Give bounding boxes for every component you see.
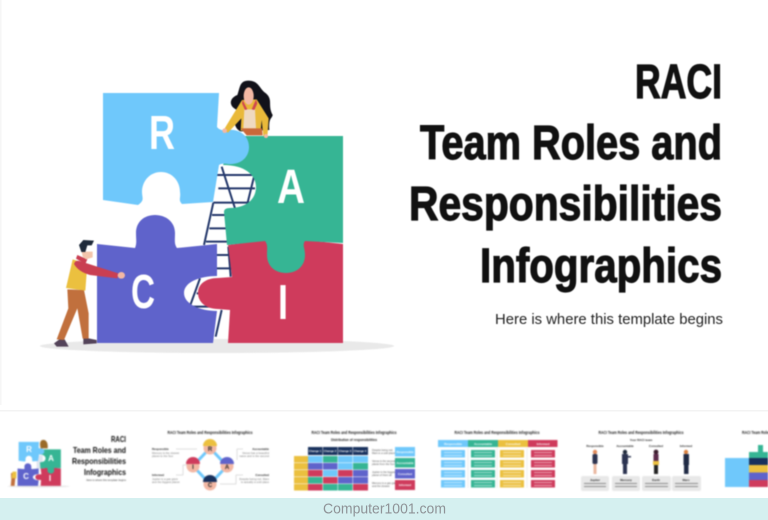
thumbnail title: RACI (111, 434, 126, 444)
thumbnail 5: your RACI team (581, 430, 701, 491)
thumbnail 5: your RACI team: Accountable (616, 444, 634, 448)
puzzle piece: R (blue) (103, 93, 249, 205)
thumbnail 3: responsibility matrix (294, 430, 415, 490)
puzzle piece: R (blue): R (149, 107, 175, 160)
puzzle piece: C (purple) (97, 215, 217, 343)
diamond links (193, 448, 227, 484)
thumbnail 5: your RACI team: Your RACI team (630, 438, 653, 442)
thumbnail title (72, 434, 126, 477)
matrix legend (372, 447, 415, 490)
matrix legend: Informed (399, 483, 411, 487)
column headers: Responsible (444, 442, 462, 446)
side labels: Responsible (152, 447, 169, 451)
thumbnail 1: cover slide (8, 434, 127, 488)
side labels: Jupiter is a gas giant (152, 477, 178, 481)
team figures (592, 450, 689, 474)
matrix table (294, 447, 368, 490)
role circles: C (208, 483, 213, 489)
side labels: Despite being red, Mars (239, 477, 270, 481)
side labels: Informed (152, 473, 164, 477)
team cards: Jupiter (590, 478, 601, 482)
matrix legend: Mercury is a gas giant (372, 481, 398, 485)
side labels: Accountable (252, 447, 269, 451)
puzzle piece: A (green): A (277, 161, 305, 214)
role circles: A (225, 465, 230, 471)
thumbnail 5: your RACI team: Responsible (586, 444, 604, 448)
footer band with site name: Computer1001.com (323, 502, 446, 518)
matrix legend: Venus is the second (372, 459, 396, 463)
thumbnail title: Responsibilities (72, 456, 126, 466)
team cards: Mercury (620, 478, 632, 482)
matrix legend: Despite being red, (372, 448, 393, 452)
thumbnail puzzle (8, 440, 70, 488)
thumbnail 2: diamond of RACI faces (152, 430, 270, 490)
side labels: and the biggest planet (152, 480, 180, 484)
side labels: name and is the second (239, 454, 269, 458)
thumbnail 2: diamond of RACI faces: RACI Team Roles and Responsibilities Infographics (168, 430, 253, 435)
title: Responsibilities (409, 178, 722, 231)
matrix table: Change 1 (309, 449, 322, 453)
matrix legend: and the closest (372, 484, 390, 488)
footer band with site name (0, 498, 768, 520)
thumbnail puzzle: C (23, 472, 29, 481)
side labels: Venus has a beautiful (242, 451, 269, 455)
thumbnail puzzle: I (49, 474, 51, 483)
team cards: Earth (652, 478, 660, 482)
thumbnail puzzle: A (48, 454, 54, 463)
thumbnail 3: responsibility matrix: RACI Team Roles and Responsibilities Infographics (312, 430, 397, 435)
side labels: Mercury is the closest (152, 451, 179, 455)
matrix legend: Consulted (398, 472, 412, 476)
column headers (438, 440, 558, 447)
column cards (441, 450, 555, 488)
matrix legend: planet from the Sun (372, 462, 395, 466)
side labels: Consulted (255, 473, 269, 477)
column headers: Accountable (474, 442, 492, 446)
puzzle piece: I (red): I (278, 276, 288, 330)
thumbnail 1: cover slide: Here is where this template begins (86, 478, 127, 482)
team cards (581, 476, 701, 491)
thumbnail 5: your RACI team: RACI Team Roles and Responsibilities Infographics (598, 430, 684, 435)
role circles: I (192, 465, 194, 471)
puzzle piece: C (purple): C (131, 266, 155, 319)
person: woman sitting on the puzzle (222, 81, 273, 138)
thumbnail 3: responsibility matrix: Distribution of responsibilities (331, 438, 377, 442)
team cards: Mars (682, 478, 690, 482)
thumbnail puzzle: R (26, 445, 32, 454)
matrix legend: Accountable (396, 461, 414, 465)
thumbnail 5: your RACI team: Consulted (649, 444, 663, 448)
title: Infographics (480, 240, 722, 293)
matrix legend: Responsible (396, 450, 414, 454)
thumbnail title: Infographics (84, 467, 126, 477)
side labels: planet to the Sun (152, 454, 174, 458)
role circles: R (208, 447, 213, 453)
thumbnail 4: four column role table: RACI Team Roles and Responsibilities Infographics (454, 430, 540, 435)
matrix legend: Jupiter is the biggest (372, 470, 396, 474)
puzzle piece: A (green) (223, 136, 343, 273)
side labels: is actually a cold place (241, 480, 269, 484)
ladder (190, 167, 255, 337)
matrix table: Change 2 (324, 449, 337, 453)
illustration: RACI jigsaw puzzle with two people (40, 81, 394, 353)
thumbnail title: Team Roles and (73, 445, 126, 455)
thumbnail 5: your RACI team: Informed (680, 444, 692, 448)
side labels (152, 447, 270, 484)
matrix legend: Mars is a cold place (372, 451, 395, 455)
matrix table: Change 3 (339, 449, 352, 453)
role circles (186, 439, 234, 490)
ground shadow (40, 339, 394, 353)
column headers: Consulted (506, 442, 520, 446)
title (409, 56, 722, 293)
thumbnail 4: four column role table (438, 430, 558, 488)
thumbnail 6: cropped pyramid slide (725, 430, 768, 487)
matrix legend: planet of them all (372, 473, 392, 477)
subtitle: Here is where this template begins (495, 311, 723, 328)
title: RACI (635, 56, 722, 109)
matrix table: Change 4 (354, 449, 367, 453)
puzzle piece: I (red) (198, 240, 343, 343)
person: man pushing the puzzle (54, 240, 125, 347)
column headers: Informed (537, 442, 550, 446)
